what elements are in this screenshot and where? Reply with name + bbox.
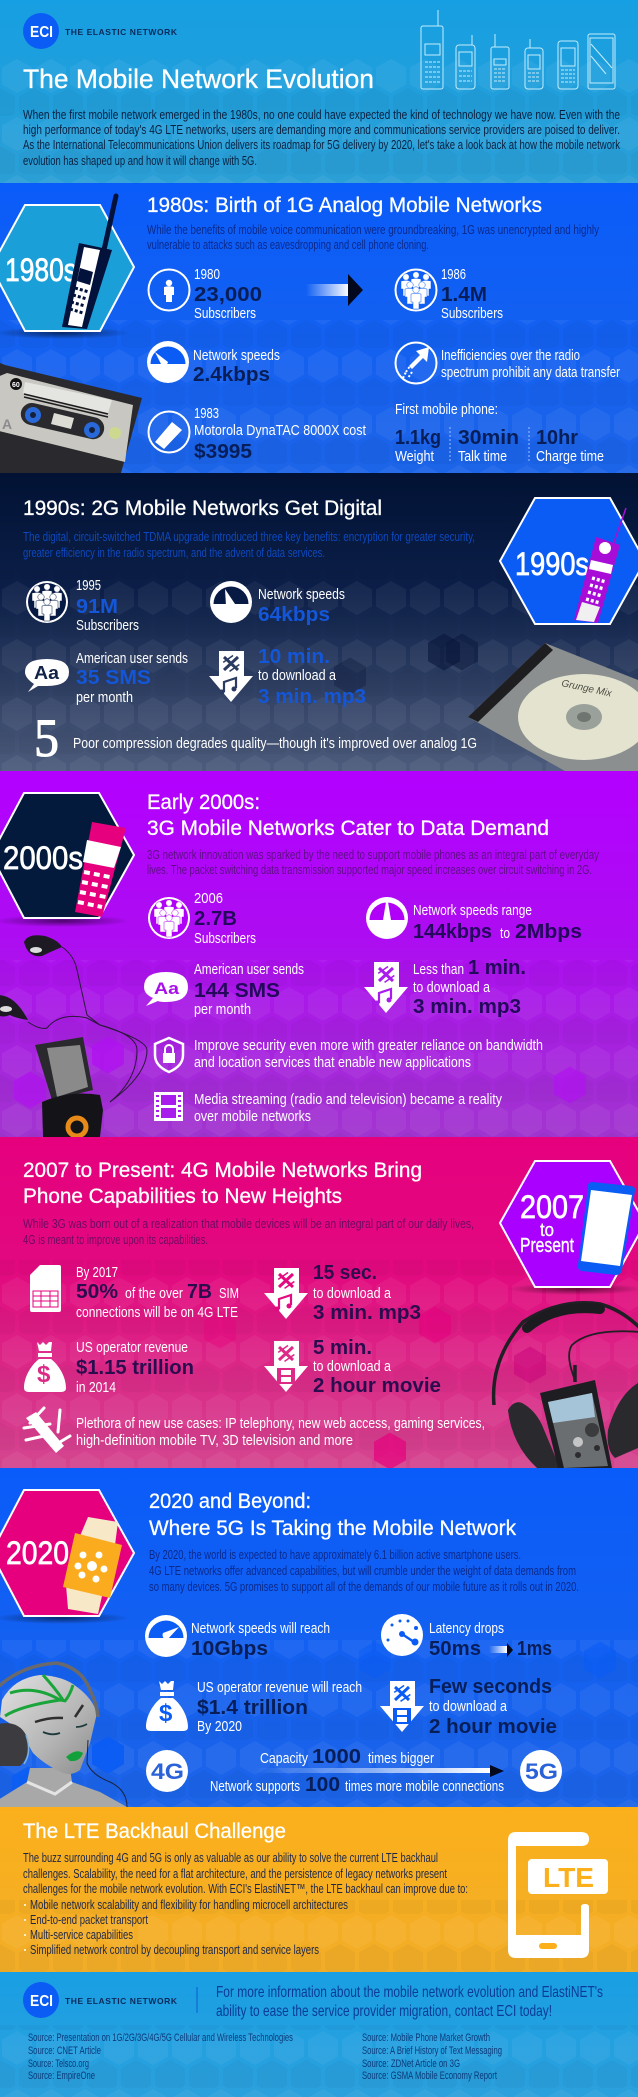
ECI logo: THE ELASTIC NETWORK — [65, 27, 178, 37]
heading: The LTE Backhaul Challenge — [23, 1820, 286, 1843]
sources: left: Source: Telsco.org — [28, 2058, 89, 2070]
stat: mp3 download: to download a — [313, 1285, 392, 1302]
bullet list — [24, 1897, 348, 1957]
ECI logo: ECI — [30, 24, 53, 41]
note: security — [155, 1037, 543, 1072]
sources: left: Source: Presentation on 1G/2G/3G/4G/5G Cellular and Wireless Technologies — [28, 2032, 293, 2044]
stat: network speeds: 2.4kbps — [193, 364, 270, 386]
4G to 5G comparison: 4G — [151, 1759, 184, 1784]
panel: footer — [0, 1972, 638, 2097]
bullet list: End-to-end packet transport — [30, 1912, 148, 1927]
stat: operator revenue: $1.15 trillion — [76, 1357, 194, 1379]
stat: movie download — [380, 1676, 557, 1738]
icon: smart watch — [63, 1517, 122, 1614]
stat: 2006 subscribers: Subscribers — [194, 930, 256, 947]
4G to 5G comparison — [146, 1746, 562, 1796]
stat: mp3 download: Less than — [413, 961, 464, 978]
intro text — [23, 107, 620, 168]
stat: mp3 download: 10 min. — [258, 646, 330, 668]
call to action — [216, 1984, 603, 2020]
stat: movie download: 2 hour movie — [313, 1375, 441, 1397]
1990s hexagon badge — [500, 498, 638, 624]
stat: DynaTAC cost: Motorola DynaTAC 8000X cost — [194, 422, 367, 439]
stat: mp3 download — [364, 957, 526, 1018]
stat: 1980 subscribers: 1980 — [194, 266, 220, 283]
body text — [23, 1850, 468, 1896]
note: use cases: Plethora of new use cases: IP telephony, new web access, gaming services, — [76, 1415, 485, 1432]
panel: 2020 and beyond — [0, 1468, 638, 1807]
first mobile phone specs — [395, 401, 604, 465]
body text — [149, 1547, 579, 1594]
body text — [147, 847, 599, 877]
image: cassette tape — [0, 361, 142, 473]
heading: 1980s: Birth of 1G Analog Mobile Networks — [147, 194, 542, 217]
stat: 1995 subscribers: 1995 — [76, 577, 101, 594]
stat: SMS: per month — [76, 689, 133, 706]
first mobile phone specs: Charge time — [536, 448, 604, 465]
stat: mp3 download: 1 min. — [468, 957, 526, 979]
panel: 1980s — [0, 183, 638, 473]
heading: 2007 to Present: 4G Mobile Networks Bring — [23, 1159, 422, 1182]
stat: mp3 download — [209, 646, 366, 708]
stat: 1986 subscribers — [396, 266, 503, 322]
icon: LTE phone: LTE — [543, 1862, 594, 1893]
stat: mp3 download: to download a — [258, 667, 337, 684]
stat: inefficiencies — [396, 342, 620, 384]
stat: SIM connections: of the over — [125, 1285, 183, 1302]
4G to 5G comparison: 5G — [525, 1759, 558, 1784]
stat: SIM connections: connections will be on 4G LTE — [76, 1304, 238, 1321]
2007 hexagon badge: 2007 — [520, 1189, 584, 1225]
stat: SIM connections — [30, 1264, 239, 1321]
note: security: and location services that enable new applications — [194, 1054, 471, 1071]
1990s hexagon badge: 1990s — [515, 546, 589, 582]
body text: challenges for the mobile network evolution. With ECI's ElastiNET™, the LTE backhaul can improve due to: — [23, 1881, 468, 1896]
intro text: evolution has shaped up and how it will change with 5G. — [23, 153, 257, 168]
sources: right: Source: A Brief History of Text Messaging — [362, 2045, 502, 2057]
icon: phone evolution line art — [421, 10, 615, 89]
sources: right: Source: GSMA Mobile Economy Report — [362, 2070, 497, 2082]
heading: Early 2000s: — [147, 791, 260, 814]
2007 hexagon badge: to — [540, 1220, 554, 1240]
first mobile phone specs: 10hr — [536, 427, 578, 449]
note: security: Improve security even more with greater reliance on bandwidth — [194, 1037, 543, 1054]
stat: 1995 subscribers: Subscribers — [76, 617, 139, 634]
stat: network speed range: to — [500, 925, 510, 942]
note: media streaming — [154, 1091, 502, 1125]
stat: SIM connections: 50% — [76, 1281, 118, 1303]
stat: operator revenue: $1.4 trillion — [197, 1697, 308, 1719]
stat: movie download: Few seconds — [429, 1676, 552, 1698]
stat: operator revenue: US operator revenue — [76, 1339, 188, 1356]
body text: vulnerable to attacks such as eavesdropping and cell phone cloning. — [147, 237, 429, 252]
stat: network speed range: 2Mbps — [515, 921, 582, 943]
panel: header — [0, 0, 638, 183]
body text: greater efficiency in the radio spectrum, and the advent of data services. — [23, 545, 325, 560]
2007 hexagon badge — [500, 1161, 638, 1295]
stat: SMS — [144, 961, 304, 1018]
2007 hexagon badge: Present — [520, 1235, 574, 1257]
stat: 1986 subscribers: 1986 — [441, 266, 466, 283]
image: CD in case: Grunge Mix — [560, 678, 614, 700]
sources: right: Source: ZDNet Article on 3G — [362, 2058, 460, 2070]
body text: The digital, circuit-switched TDMA upgrade introduced three key benefits: encryption for greater security, — [23, 529, 475, 544]
4G to 5G comparison: Network supports — [210, 1778, 300, 1795]
icon: audio quality mark: 5 — [34, 708, 59, 768]
stat: 1986 subscribers: 1.4M — [441, 284, 487, 306]
heading — [23, 1159, 422, 1208]
stat: 2006 subscribers: 2006 — [194, 890, 223, 907]
stat: mp3 download: 3 min. mp3 — [313, 1302, 421, 1324]
stat: mp3 download: 3 min. mp3 — [413, 996, 521, 1018]
ECI logo: ECI — [30, 1993, 53, 2010]
image: music player and earbuds — [0, 935, 147, 1137]
stat: SMS: Aa — [154, 979, 180, 998]
stat: mp3 download — [264, 1262, 421, 1324]
stat: network speeds: 64kbps — [258, 604, 330, 626]
ECI logo — [23, 13, 178, 49]
stat: SMS: Aa — [34, 663, 60, 683]
bullet list: Multi-service capabilities — [30, 1927, 133, 1942]
heading — [147, 791, 549, 840]
body text — [23, 529, 475, 560]
stat: operator revenue: US operator revenue will reach — [197, 1679, 362, 1696]
heading: Phone Capabilities to New Heights — [23, 1185, 342, 1208]
ECI logo: THE ELASTIC NETWORK — [65, 1996, 178, 2006]
stat: DynaTAC cost: 1983 — [194, 405, 219, 422]
note: use cases — [24, 1408, 485, 1453]
stat: latency: 1ms — [517, 1638, 552, 1660]
stat: operator revenue: By 2020 — [197, 1718, 242, 1735]
2020 hexagon badge: 2020 — [6, 1535, 69, 1571]
stat: mp3 download: 15 sec. — [313, 1262, 377, 1284]
stat: network speeds: Network speeds — [258, 586, 345, 603]
stat: network speeds — [145, 1615, 330, 1660]
4G to 5G comparison: 1000 — [312, 1746, 361, 1768]
stat: operator revenue — [24, 1339, 194, 1396]
4G to 5G comparison: times more mobile connections — [345, 1778, 504, 1795]
stat: 1995 subscribers — [26, 577, 139, 634]
image: CD in case — [468, 643, 638, 771]
stat: mp3 download: 3 min. mp3 — [258, 686, 366, 708]
stat: 1995 subscribers: 91M — [76, 596, 118, 618]
first mobile phone specs: Weight — [395, 448, 435, 465]
stat: network speeds: Network speeds will reach — [191, 1620, 330, 1637]
stat: network speed range — [366, 897, 582, 943]
2000s hexagon badge: 2000s — [3, 840, 83, 876]
note: media streaming: Media streaming (radio and television) became a reality — [194, 1091, 502, 1108]
icon: candybar phone — [75, 822, 126, 917]
stat: operator revenue: in 2014 — [76, 1379, 116, 1396]
image: cassette tape: A — [2, 416, 12, 432]
heading: Where 5G Is Taking the Mobile Network — [149, 1517, 516, 1540]
stat: SMS: American user sends — [194, 961, 304, 978]
stat: operator revenue: $ — [159, 1700, 173, 1727]
stat: mp3 download: to download a — [413, 979, 491, 996]
stat: movie download — [264, 1337, 441, 1397]
stat: SIM connections: 7B — [187, 1281, 212, 1303]
first mobile phone specs: 1.1kg — [395, 427, 441, 449]
4G to 5G comparison: 100 — [305, 1774, 340, 1796]
stat: DynaTAC cost: $3995 — [194, 441, 252, 463]
stat: 1980 subscribers — [148, 266, 262, 322]
body text — [23, 1216, 474, 1247]
stat: SIM connections: By 2017 — [76, 1264, 118, 1281]
body text: The buzz surrounding 4G and 5G is only as valuable as our ability to solve the current LTE backhaul — [23, 1850, 438, 1865]
stat: network speeds — [147, 341, 280, 386]
panel: 2000s — [0, 771, 638, 1137]
stat: network speeds — [210, 581, 345, 626]
stat: movie download: 2 hour movie — [429, 1716, 557, 1738]
1980s hexagon badge: 1980s — [5, 252, 77, 288]
stat: SIM connections: SIM — [219, 1285, 239, 1302]
first mobile phone specs: First mobile phone: — [395, 401, 498, 418]
stat: movie download: 5 min. — [313, 1337, 372, 1359]
stat: SMS: 144 SMS — [194, 980, 280, 1002]
stat: network speeds: Network speeds — [193, 347, 280, 364]
stat: inefficiencies: Inefficiencies over the radio — [441, 347, 580, 364]
heading: 2020 and Beyond: — [149, 1490, 311, 1513]
icon: LTE phone — [508, 1832, 608, 1958]
stat: movie download: to download a — [429, 1698, 508, 1715]
image: headphones and phone — [494, 1303, 638, 1468]
stat: latency — [381, 1614, 552, 1660]
stat: network speed range: Network speeds range — [413, 902, 532, 919]
sources: left — [28, 2032, 293, 2082]
stat: movie download: to download a — [313, 1358, 392, 1375]
stat: latency: Latency drops — [429, 1620, 504, 1637]
body text: 4G is meant to improve upon its capabilities. — [23, 1232, 208, 1247]
stat: 1980 subscribers: 23,000 — [194, 284, 262, 306]
stat: 2006 subscribers: 2.7B — [194, 908, 237, 930]
stat: DynaTAC cost — [148, 405, 367, 463]
2020 hexagon badge — [0, 1490, 134, 1624]
stat: operator revenue — [146, 1679, 362, 1735]
stat: SMS: American user sends — [76, 650, 188, 667]
note: use cases: high-definition mobile TV, 3D television and more — [76, 1432, 353, 1449]
panel: 1990s — [0, 473, 638, 771]
panel: 2007 to present — [0, 1137, 638, 1470]
stat: 1986 subscribers: Subscribers — [441, 305, 503, 322]
panel: LTE backhaul challenge — [0, 1807, 638, 1972]
icon: brick phone — [62, 196, 116, 329]
first mobile phone specs: 30min — [458, 427, 519, 449]
stat: 2006 subscribers — [148, 890, 256, 947]
icon: purple phone — [574, 508, 626, 623]
4G to 5G comparison: Capacity — [260, 1750, 308, 1767]
2000s hexagon badge — [0, 793, 134, 927]
heading — [149, 1490, 516, 1540]
bullet list: Simplified network control by decoupling transport and service layers — [30, 1942, 319, 1957]
sources: left: Source: EmpireOne — [28, 2070, 95, 2082]
image: robot with headphones — [0, 1663, 127, 1807]
body text — [147, 222, 599, 252]
note: media streaming: over mobile networks — [194, 1108, 311, 1125]
audio quality note: Poor compression degrades quality—though it's improved over analog 1G — [73, 735, 477, 752]
stat: 1980 subscribers: Subscribers — [194, 305, 256, 322]
stat: SMS — [25, 650, 188, 706]
arrow — [306, 274, 363, 306]
sources: left: Source: CNET Article — [28, 2045, 101, 2057]
sources: right: Source: Mobile Phone Market Growth — [362, 2032, 490, 2044]
title: The Mobile Network Evolution — [23, 64, 374, 94]
heading: 1990s: 2G Mobile Networks Get Digital — [23, 497, 382, 520]
stat: operator revenue: $ — [37, 1361, 51, 1388]
bullet list: Mobile network scalability and flexibility for handling microcell architectures — [30, 1897, 348, 1912]
ECI logo — [23, 1982, 178, 2018]
image: cassette tape: 60 — [12, 382, 20, 389]
stat: network speeds: 10Gbps — [191, 1638, 268, 1660]
icon: smartphone — [578, 1182, 635, 1275]
stat: SMS: per month — [194, 1001, 251, 1018]
body text: challenges. Scalability, the need for a flat architecture, and the persistence of legacy networks present — [23, 1866, 447, 1881]
4G to 5G comparison: times bigger — [368, 1750, 434, 1767]
first mobile phone specs: Talk time — [458, 448, 507, 465]
heading: 3G Mobile Networks Cater to Data Demand — [147, 817, 549, 840]
stat: network speed range: 144kbps — [413, 921, 492, 943]
sources: right — [362, 2032, 502, 2082]
stat: SMS: 35 SMS — [76, 667, 151, 689]
stat: latency: 50ms — [429, 1638, 481, 1660]
1980s hexagon badge — [0, 205, 134, 339]
body text: While 3G was born out of a realization that mobile devices will be an integral part of our daily lives, — [23, 1216, 474, 1231]
